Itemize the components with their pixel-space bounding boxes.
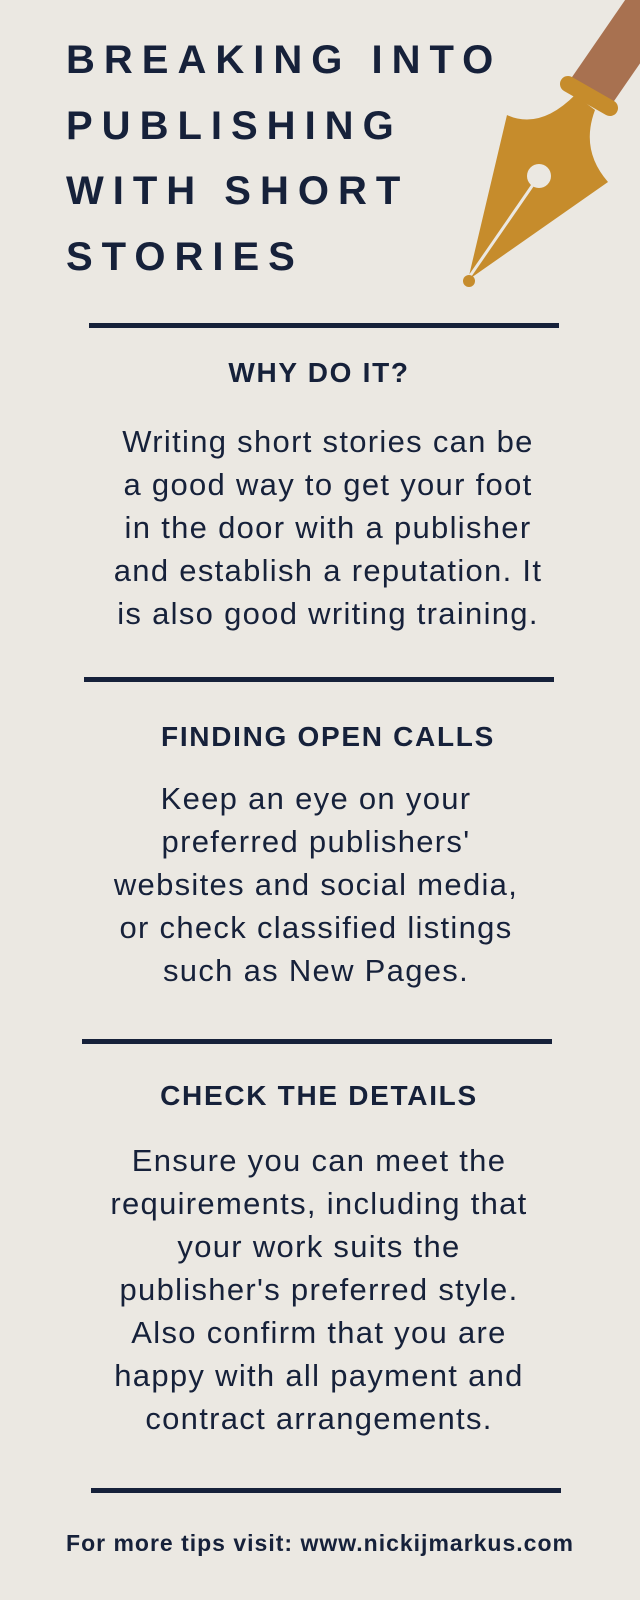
text: why: and establish a reputation. It [114,553,542,588]
title [66,38,502,278]
text: details: Ensure you can meet the [132,1143,506,1178]
text: why: Writing short stories can be [122,424,534,459]
text: details: requirements, including that [110,1186,528,1221]
text: details: Also confirm that you are [131,1315,507,1350]
text: details: contract arrangements. [145,1401,493,1436]
text: open calls: websites and social media, [114,867,518,902]
text: open calls: or check classified listings [119,910,513,945]
heading: finding open calls: FINDING OPEN CALLS [161,721,495,752]
title: STORIES [66,234,304,278]
text: open calls: preferred publishers' [162,824,470,859]
text: why [114,424,542,631]
text: open calls: Keep an eye on your [161,781,471,816]
text: details: publisher's preferred style. [120,1272,518,1307]
text: why: in the door with a publisher [125,510,531,545]
text: details: happy with all payment and [114,1358,524,1393]
title: BREAKING INTO [66,38,502,82]
text: open calls [114,781,518,988]
title: WITH SHORT [66,169,409,213]
title: PUBLISHING [66,104,403,148]
heading: check the details: CHECK THE DETAILS [160,1080,478,1111]
footer: For more tips visit: www.nickijmarkus.com [66,1530,574,1556]
text: why: a good way to get your foot [123,467,533,502]
heading: why do it: WHY DO IT? [228,357,410,388]
text: why: is also good writing training. [117,596,539,631]
text: details [110,1143,528,1436]
icon: fountain pen [463,0,640,287]
text: open calls: such as New Pages. [163,953,469,988]
text: details: your work suits the [177,1229,461,1264]
